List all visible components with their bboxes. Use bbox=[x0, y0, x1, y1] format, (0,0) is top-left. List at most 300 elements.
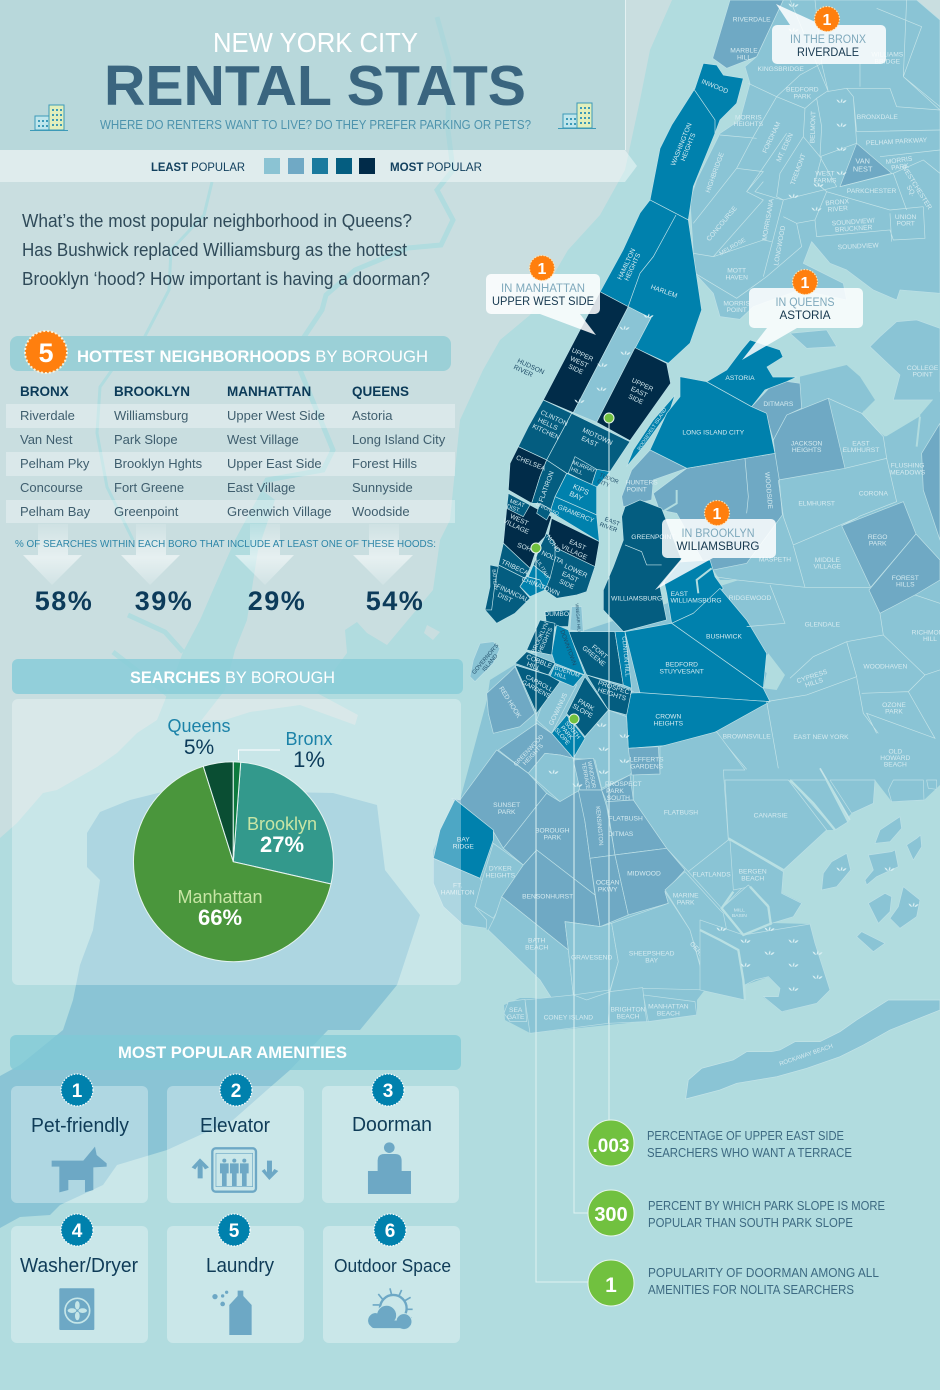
pie chart bbox=[134, 762, 333, 962]
Greenpoint and Williamsburg bbox=[603, 500, 682, 632]
Bronx base bbox=[690, 0, 940, 319]
arrows down to percentages bbox=[23, 524, 413, 585]
map: Bronx and upper Manhattan: RIVER bbox=[827, 205, 848, 214]
fact: Park Slope bbox=[588, 1190, 885, 1236]
leader lines from map to facts bbox=[536, 418, 609, 1282]
map: Manhattan, western Queens and north Brooklyn: DIST bbox=[496, 592, 513, 605]
map: Central and South Brooklyn: RIDGE bbox=[453, 844, 474, 851]
card: doorman: 3 bbox=[383, 1081, 393, 1102]
leader line: Bronx bbox=[238, 750, 280, 760]
map: Bronx and upper Manhattan: FORDHAM bbox=[762, 121, 782, 154]
Flatlands bbox=[688, 840, 750, 908]
Bedford Stuyvesant bbox=[625, 623, 770, 702]
Central Park bbox=[573, 307, 651, 422]
fact: terrace bbox=[588, 1120, 852, 1166]
map: Manhattan, western Queens and north Brooklyn: LONG ISLAND CITY bbox=[682, 430, 745, 437]
map: Manhattan, western Queens and north Brooklyn: CITY bbox=[596, 479, 610, 489]
map: Central and South Brooklyn: GRAVESEND bbox=[571, 954, 612, 961]
map: Queens and east Brooklyn: BEDFORD bbox=[665, 661, 698, 668]
table: neighborhoods by borough: Upper West Side bbox=[227, 408, 325, 423]
map: Manhattan, western Queens and north Brooklyn: UPPER bbox=[570, 347, 594, 363]
Chelsea bbox=[508, 447, 547, 503]
Greenwood Cemetery bbox=[528, 753, 580, 802]
map: Central and South Brooklyn: BEACH bbox=[525, 944, 548, 951]
Upper West Side bbox=[543, 292, 628, 413]
map: Manhattan, western Queens and north Brooklyn: EAST bbox=[568, 538, 587, 552]
map: Central and South Brooklyn: FORT bbox=[590, 644, 608, 661]
fact: Park Slope: 300 bbox=[594, 1204, 628, 1226]
Fresh Creek water bbox=[820, 768, 850, 820]
callout: Manhattan Upper West Side: IN MANHATTAN bbox=[501, 283, 585, 295]
map: Central and South Brooklyn: BROOKLYN bbox=[531, 622, 550, 654]
icon: buildings left bbox=[30, 105, 68, 130]
map: Bronx and upper Manhattan: PARK bbox=[793, 93, 812, 100]
map: Bronx and upper Manhattan: MARBLE bbox=[730, 48, 758, 55]
map: Bronx and upper Manhattan: HEIGHTS bbox=[734, 121, 764, 128]
table: neighborhoods by borough: BROOKLYN bbox=[114, 384, 190, 399]
map: Manhattan, western Queens and north Brooklyn: DIST. bbox=[506, 504, 521, 514]
card: outdoor space: Outdoor Space bbox=[334, 1256, 451, 1276]
map: Queens and east Brooklyn: PARK bbox=[885, 709, 903, 716]
map: Manhattan, western Queens and north Brooklyn: UNION SQ. bbox=[535, 502, 561, 518]
fact: doorman: AMENITIES FOR NOLITA SEARCHERS bbox=[648, 1283, 854, 1297]
Brighton Beach bbox=[608, 988, 647, 1023]
map: Manhattan, western Queens and north Brooklyn: MIDTOWN bbox=[581, 427, 614, 447]
map: Manhattan, western Queens and north Brooklyn: TRIBECA bbox=[500, 559, 530, 577]
callout: Bronx Riverdale: 1 bbox=[823, 12, 832, 29]
Midtown East bbox=[547, 413, 630, 473]
intro text bbox=[22, 211, 430, 289]
Lefferts Gardens bbox=[628, 747, 660, 775]
Tribeca bbox=[498, 543, 530, 578]
map: Bronx and upper Manhattan: POINT bbox=[726, 307, 747, 314]
map: Central and South Brooklyn: PARK bbox=[559, 725, 574, 741]
map: Queens and east Brooklyn: DITMARS bbox=[763, 401, 794, 408]
map: Bronx and upper Manhattan: MORRIS bbox=[723, 300, 751, 307]
map: Queens and east Brooklyn: ELMHURST bbox=[843, 447, 879, 454]
map: Bronx and upper Manhattan: HAVEN bbox=[725, 274, 748, 281]
Governors Island bbox=[470, 642, 500, 682]
map: Central and South Brooklyn: PARK bbox=[677, 900, 695, 907]
map: South Brooklyn and Queens base land bbox=[433, 560, 940, 1033]
card: washer/dryer bbox=[11, 1214, 148, 1343]
Astoria bbox=[707, 340, 797, 407]
map: Bronx and upper Manhattan: MELROSE bbox=[719, 238, 747, 257]
map: Central and South Brooklyn: GREENWOOD bbox=[513, 734, 546, 768]
map: Manhattan, western Queens and north Brooklyn: TUDOR bbox=[598, 473, 619, 486]
map: Queens and east Brooklyn: HEIGHTS bbox=[792, 447, 822, 454]
map: Central and South Brooklyn: BEACH bbox=[617, 1014, 640, 1021]
map: Central and South Brooklyn: BOROUGH bbox=[535, 828, 570, 835]
Riverdale bbox=[713, 0, 783, 68]
title: Rental Stats: RENTAL STATS bbox=[104, 54, 526, 118]
label: Brooklyn: 27% bbox=[260, 832, 304, 857]
card: elevator: 2 bbox=[231, 1081, 241, 1102]
callout: Brooklyn Williamsburg: WILIAMSBURG bbox=[676, 539, 760, 553]
Jamaica Bay channels bbox=[700, 780, 848, 1000]
Battery Park City bbox=[485, 565, 498, 610]
map: Manhattan, western Queens and north Brooklyn: VINEGAR HILL bbox=[574, 603, 582, 634]
map: Central and South Brooklyn: CLINTON HILL bbox=[620, 636, 630, 678]
table: neighborhoods by borough: Upper East Side bbox=[227, 456, 322, 471]
heading bar: hottest neighborhoods bbox=[10, 331, 451, 373]
map: Central and South Brooklyn: GOVERNOR'S bbox=[471, 643, 501, 676]
Park Slope bbox=[567, 677, 608, 737]
map: Queens and east Brooklyn: HILL bbox=[923, 636, 937, 643]
map: Manhattan, western Queens and north Brooklyn: FINANCIAL bbox=[495, 583, 530, 604]
land: New Jersey shoreline bbox=[0, 0, 940, 838]
fact: doorman bbox=[588, 1260, 879, 1306]
map: Manhattan, western Queens and north Brooklyn: EAST bbox=[671, 591, 688, 598]
map: Manhattan, western Queens and north Brooklyn: VILLAGE bbox=[560, 543, 588, 562]
map: Central and South Brooklyn: ISLAND bbox=[482, 653, 499, 673]
Kips Bay bbox=[555, 473, 597, 515]
map: Manhattan, western Queens and north Brooklyn: MEAT bbox=[509, 499, 526, 510]
percentages: 29% bbox=[248, 586, 306, 616]
heading bar: searches by borough: SEARCHES BY BOROUGH bbox=[130, 668, 335, 687]
callout: Queens Astoria: 1 bbox=[801, 275, 810, 292]
Windsor Terrace bbox=[573, 758, 602, 790]
map: Manhattan, western Queens and north Brooklyn: POINT bbox=[626, 486, 647, 493]
map: Queens and east Brooklyn: HOWARD bbox=[880, 755, 911, 762]
card: pet-friendly: Pet-friendly bbox=[31, 1115, 129, 1137]
map: Queens and east Brooklyn: EAST NEW YORK bbox=[793, 734, 849, 741]
map: Queens and east Brooklyn: RIDGEWOOD bbox=[729, 595, 771, 602]
Manhattan Beach bbox=[643, 995, 697, 1022]
map: Central and South Brooklyn: HEIGHTS bbox=[538, 627, 555, 654]
Boerum Hill bbox=[550, 665, 583, 687]
map: Bronx and upper Manhattan: MOTT bbox=[727, 268, 746, 275]
table: neighborhoods by borough: Sunnyside bbox=[352, 480, 413, 495]
map: Central and South Brooklyn: TERRACE bbox=[580, 762, 590, 790]
map: Bronx and upper Manhattan: WILLIAMS bbox=[871, 52, 904, 59]
fact: terrace: .003 bbox=[593, 1136, 629, 1157]
map: Manhattan, western Queens and north Brooklyn: HUDSON bbox=[516, 358, 545, 376]
callout: Queens Astoria: ASTORIA bbox=[780, 308, 830, 322]
map: Queens and east Brooklyn: HILLS bbox=[896, 582, 915, 589]
map: Queens and east Brooklyn: STUYVESANT bbox=[659, 668, 704, 675]
map: Manhattan, western Queens and north Brooklyn: EAST bbox=[560, 571, 579, 584]
map: Central and South Brooklyn: LEFFERTS bbox=[630, 757, 664, 764]
map: Canarsie and Jamaica Bay: BERGEN bbox=[739, 868, 767, 875]
map: Central and South Brooklyn: BENSONHURST bbox=[522, 893, 573, 900]
map: Manhattan, western Queens and north Brooklyn: ROOSEVELT ISLAND bbox=[637, 407, 669, 452]
Sunset Park bbox=[452, 750, 547, 848]
Hunters Point bbox=[622, 450, 687, 507]
map: Manhattan, western Queens and north Brooklyn: UPPER bbox=[630, 377, 654, 393]
map: Bronx and upper Manhattan: HEIGHTS bbox=[680, 132, 698, 162]
Chinatown bbox=[520, 577, 545, 597]
South Park Slope bbox=[552, 715, 585, 758]
map: Queens and east Brooklyn: OZONE bbox=[882, 702, 906, 709]
map: Queens and east Brooklyn: HILLS bbox=[804, 677, 825, 689]
heading bar: most popular amenities bbox=[10, 1035, 461, 1070]
map: Central and South Brooklyn: BATH bbox=[528, 937, 545, 944]
percentages: 54% bbox=[366, 586, 424, 616]
Ridgewood reservoir water bbox=[760, 653, 785, 690]
card: washer/dryer: Washer/Dryer bbox=[20, 1255, 138, 1277]
map: Bronx and upper Manhattan: HIGHBRIDGE bbox=[705, 151, 726, 194]
map: Manhattan, western Queens and north Brooklyn: EAST bbox=[604, 517, 621, 528]
card: pet-friendly: 1 bbox=[72, 1081, 83, 1102]
Greenwood Heights bbox=[498, 723, 573, 773]
label: Bronx: 1% bbox=[293, 747, 325, 772]
table: neighborhoods by borough bbox=[6, 384, 455, 523]
title: New York City: NEW YORK CITY bbox=[213, 27, 418, 58]
map: Manhattan, western Queens and north Brooklyn: HILL bbox=[570, 467, 583, 477]
map: Manhattan, western Queens and north Brooklyn: SIDE bbox=[558, 578, 575, 591]
map: Central and South Brooklyn: PARK bbox=[576, 698, 596, 713]
Flatbush bbox=[633, 732, 745, 872]
Murray Hill bbox=[568, 457, 597, 485]
header tint panel bbox=[0, 0, 625, 150]
map: Central and South Brooklyn bbox=[433, 620, 750, 1033]
intro text: Brooklyn ‘hood? How important is having a doorman? bbox=[22, 269, 430, 289]
intro text: Has Bushwick replaced Williamsburg as the hottest bbox=[22, 240, 407, 260]
map: Manhattan, western Queens and north Brooklyn: HUNTERS bbox=[626, 480, 658, 487]
table: neighborhoods by borough: MANHATTAN bbox=[227, 384, 311, 399]
map: Bronx and upper Manhattan: PARKCHESTER bbox=[847, 188, 897, 195]
map: Manhattan, western Queens and north Brooklyn: KITCHEN bbox=[531, 423, 561, 442]
percentages: 39% bbox=[135, 586, 193, 616]
callout: Brooklyn Williamsburg: 1 bbox=[713, 506, 722, 523]
map: Bronx and upper Manhattan: CONCOURSE bbox=[706, 205, 739, 243]
map: Bronx and upper Manhattan: PARK bbox=[891, 163, 910, 172]
Sea Gate bbox=[504, 999, 527, 1022]
map: Central and South Brooklyn: GERRITSEN BEACH bbox=[688, 941, 734, 994]
map: Manhattan, western Queens and north Brooklyn: SOHO bbox=[516, 542, 537, 555]
callout: Brooklyn Williamsburg bbox=[655, 500, 776, 590]
map: Central and South Brooklyn: HEIGHTS bbox=[486, 873, 516, 880]
Flushing edge bbox=[922, 423, 940, 540]
Washington Heights, Inwood, Hamilton Heights and Harlem bbox=[600, 63, 743, 363]
table: neighborhoods by borough: Williamsburg bbox=[114, 408, 188, 423]
Rego Park bbox=[842, 502, 916, 587]
map: Central and South Brooklyn: FLATBUSH bbox=[609, 816, 643, 823]
map: Central and South Brooklyn: SOUTH bbox=[607, 795, 630, 802]
map: Central and South Brooklyn: PARK bbox=[606, 788, 624, 795]
label: Brooklyn: Brooklyn bbox=[247, 814, 317, 834]
map: Queens and east Brooklyn: REGO bbox=[868, 534, 887, 541]
table: neighborhoods by borough: Forest Hills bbox=[352, 456, 418, 471]
map: Bronx and upper Manhattan: MORRISANIA bbox=[761, 198, 776, 241]
Long Island City bbox=[650, 377, 775, 468]
card: outdoor space: 6 bbox=[385, 1221, 395, 1242]
map: Bronx and upper Manhattan: HILL bbox=[737, 54, 751, 61]
map: Bronx and upper Manhattan: MORRIS bbox=[735, 114, 762, 121]
callout: Queens Astoria bbox=[742, 270, 863, 360]
map: Central and South Brooklyn: SEA bbox=[509, 1007, 523, 1014]
table: neighborhoods by borough: BRONX bbox=[20, 384, 69, 399]
card: laundry: Laundry bbox=[206, 1255, 274, 1277]
fact: doorman: POPULARITY OF DOORMAN AMONG ALL bbox=[648, 1266, 879, 1280]
icon: buildings right bbox=[558, 103, 596, 128]
map: Canarsie and Jamaica Bay: CANARSIE bbox=[754, 812, 788, 819]
label: Manhattan bbox=[177, 887, 263, 930]
table: neighborhoods by borough: Park Slope bbox=[114, 432, 178, 447]
card: elevator: Elevator bbox=[200, 1115, 270, 1137]
card: pet-friendly bbox=[11, 1074, 148, 1203]
Crown Heights bbox=[625, 693, 770, 748]
map: Manhattan, western Queens and north Brooklyn: WEST bbox=[509, 513, 529, 528]
map: Bronx and upper Manhattan: SQ. bbox=[905, 184, 917, 198]
East Williamsburg creek water bbox=[697, 568, 712, 593]
map: Central and South Brooklyn: CARROLL bbox=[524, 674, 554, 694]
subtitle: WHERE DO RENTERS WANT TO LIVE? DO THEY PREFER PARKING OR PETS? bbox=[100, 118, 531, 132]
map: Central and South Brooklyn: KENSINGTON bbox=[594, 806, 603, 846]
Clinton Hill bbox=[615, 632, 632, 688]
map: Central and South Brooklyn: SOUTH bbox=[563, 721, 581, 741]
label: Brooklyn bbox=[247, 814, 317, 857]
decorative park tufts bbox=[548, 2, 918, 991]
map: Manhattan, western Queens and north Brooklyn: LIL ITALY bbox=[535, 559, 551, 581]
card: laundry: 5 bbox=[229, 1221, 240, 1242]
map: Manhattan, western Queens and north Brooklyn: ASTORIA bbox=[725, 375, 755, 382]
fact: Park Slope: PERCENT BY WHICH PARK SLOPE IS MORE bbox=[648, 1199, 885, 1213]
callout: Manhattan Upper West Side: 1 bbox=[538, 261, 547, 278]
Downtown Brooklyn bbox=[552, 625, 585, 675]
map: Manhattan, western Queens and north Brooklyn: BAY bbox=[568, 489, 585, 503]
map: Queens and east Brooklyn: MEADOWS bbox=[890, 469, 926, 476]
Prospect Heights bbox=[587, 675, 632, 715]
Flatiron bbox=[532, 460, 567, 512]
map: Manhattan, western Queens and north Brooklyn: FLATIRON bbox=[538, 470, 556, 503]
percentages: 58% bbox=[35, 586, 93, 616]
map: Central and South Brooklyn: PROSPECT bbox=[597, 680, 634, 698]
Carroll Gardens bbox=[515, 665, 560, 713]
callout: Bronx Riverdale: IN THE BRONX bbox=[790, 34, 866, 46]
fact: doorman: 1 bbox=[605, 1274, 617, 1297]
map: Queens and east Brooklyn: CROWN bbox=[655, 713, 681, 720]
map: Manhattan, western Queens and north Brooklyn: HAMILTON bbox=[617, 247, 637, 281]
Red Hook bbox=[487, 667, 535, 733]
Dyker Heights bbox=[475, 843, 523, 918]
map: Bronx and upper Manhattan: BRONX bbox=[825, 198, 850, 207]
Kensington bbox=[578, 790, 615, 858]
map: Manhattan, western Queens and north Brooklyn: MURRAY bbox=[571, 460, 596, 475]
map: Manhattan, western Queens and north Brooklyn: SIDE bbox=[567, 363, 585, 376]
Vinegar Hill bbox=[570, 607, 583, 632]
legend: least to most popular bbox=[151, 158, 482, 174]
map: Bronx and upper Manhattan: BELMONT bbox=[809, 111, 818, 143]
card: doorman bbox=[322, 1074, 459, 1203]
Flushing inlet water bbox=[863, 412, 920, 447]
map: Bronx and upper Manhattan: SOUNDVIEW/ bbox=[832, 217, 875, 227]
label: Queens: Queens bbox=[167, 716, 231, 736]
map: Manhattan, western Queens and north Brooklyn: EAST bbox=[580, 435, 599, 449]
map: Queens and east Brooklyn: WOODSIDE bbox=[763, 472, 773, 510]
map: Bronx and upper Manhattan: WASHINGTON bbox=[670, 122, 694, 167]
Little Italy bbox=[528, 565, 550, 590]
map: Queens and east Brooklyn: OLD bbox=[888, 748, 902, 755]
map: Central and South Brooklyn: WINDSOR bbox=[586, 761, 596, 789]
map: Central and South Brooklyn: GREENE bbox=[580, 645, 607, 669]
map: Central and South Brooklyn: MANHATTAN bbox=[648, 1004, 689, 1011]
fact: terrace: SEARCHERS WHO WANT A TERRACE bbox=[647, 1146, 852, 1160]
Bushwick bbox=[672, 588, 767, 688]
map: Manhattan, western Queens and north Brooklyn: EAST bbox=[630, 386, 648, 399]
map: Manhattan, western Queens and north Brooklyn: HELLS bbox=[537, 417, 559, 432]
map: Manhattan, western Queens and north Brooklyn: KIPS bbox=[572, 482, 591, 497]
heading bar: most popular amenities: MOST POPULAR AMENITIES bbox=[118, 1043, 347, 1062]
map: Bronx and upper Manhattan: RIVERDALE bbox=[733, 17, 771, 24]
map: Queens and east Brooklyn: MIDDLE bbox=[815, 557, 840, 564]
table: neighborhoods by borough: West Village bbox=[227, 432, 299, 447]
Dumbo bbox=[545, 610, 570, 627]
Lower East Side bbox=[545, 543, 595, 598]
table: neighborhoods by borough: Pelham Pky bbox=[20, 456, 90, 471]
Van Nest bbox=[840, 143, 892, 187]
map: Central and South Brooklyn: COBBLE bbox=[525, 654, 553, 670]
table: neighborhoods by borough: Brooklyn Hghts bbox=[114, 456, 203, 471]
card: laundry bbox=[167, 1214, 304, 1343]
Bronx neighborhood boundaries bbox=[693, 0, 940, 298]
map: Queens and east Brooklyn: CYPRESS bbox=[796, 668, 829, 685]
map: Rockaway peninsula: ROCKAWAY BEACH bbox=[779, 1044, 834, 1068]
Flatbush south bbox=[607, 800, 667, 855]
map: Central and South Brooklyn: DITMAS bbox=[608, 831, 634, 838]
table: neighborhoods by borough: Astoria bbox=[352, 408, 393, 423]
heading bar: searches by borough bbox=[12, 659, 463, 694]
map: Queens and east Brooklyn: HEIGHTS bbox=[654, 720, 684, 727]
map: Central and South Brooklyn: FLATBUSH bbox=[664, 810, 698, 817]
map: Manhattan, western Queens and north Brooklyn: VILLAGE bbox=[502, 518, 530, 536]
map: Queens and east Brooklyn: EAST bbox=[852, 440, 870, 447]
Clinton / Hell's Kitchen bbox=[518, 400, 572, 460]
table: neighborhoods by borough: Greenwich Village bbox=[227, 504, 332, 519]
Brooklyn Heights bbox=[527, 620, 555, 655]
map: Queens and east Brooklyn: VILLAGE bbox=[813, 564, 842, 571]
map: Central and South Brooklyn: DYKER bbox=[489, 866, 512, 873]
map: Central and South Brooklyn: PARK bbox=[544, 835, 562, 842]
panel: searches pie chart bbox=[12, 699, 461, 985]
map: Canarsie and Jamaica Bay: BEACH bbox=[741, 875, 764, 882]
callout: Brooklyn Williamsburg: IN BROOKLYN bbox=[682, 528, 754, 540]
Borough Park bbox=[503, 790, 595, 895]
map: Manhattan, western Queens and north Brooklyn: WILLIAMSBURG bbox=[670, 598, 721, 605]
map: Manhattan, western Queens and north Brooklyn: LOWER bbox=[563, 563, 588, 580]
map: Central and South Brooklyn: BRIGHTON bbox=[610, 1007, 646, 1014]
map: Rikers Island and College Point shore: POINT bbox=[912, 372, 933, 379]
map: Central and South Brooklyn: SLOPE bbox=[571, 703, 594, 720]
label: Bronx bbox=[285, 729, 333, 772]
map: Bronx and upper Manhattan: WESTCHESTER bbox=[900, 164, 933, 211]
map: Central and South Brooklyn: HEIGHTS bbox=[522, 743, 545, 767]
map: Manhattan, western Queens and north Brooklyn: HEIGHTS bbox=[624, 252, 643, 282]
map: Bronx and upper Manhattan: NEST bbox=[853, 164, 873, 173]
map: Central and South Brooklyn: HILL bbox=[553, 672, 568, 682]
Bath Beach bbox=[488, 897, 573, 998]
Marine Park bbox=[665, 872, 740, 997]
Sheepshead Bay bbox=[610, 892, 707, 992]
card: outdoor space bbox=[323, 1214, 460, 1343]
map: Bronx and upper Manhattan: LONGWOOD bbox=[773, 225, 787, 266]
map: Central and South Brooklyn: SHEEPSHEAD bbox=[629, 950, 675, 957]
map: Central and South Brooklyn: FLATLANDS bbox=[693, 872, 731, 879]
label: Manhattan: 66% bbox=[198, 905, 242, 930]
map: Manhattan, western Queens and north Brooklyn: NOHO bbox=[544, 534, 561, 554]
map: Queens and east Brooklyn: FLUSHING bbox=[891, 463, 924, 470]
percentages bbox=[35, 586, 424, 616]
Queens base bbox=[713, 365, 940, 580]
map: Central and South Brooklyn: RED HOOK bbox=[497, 686, 522, 720]
East Village bbox=[547, 518, 599, 567]
map: Canarsie and Jamaica Bay: BASIN bbox=[732, 913, 747, 919]
map: Central and South Brooklyn: HAMILTON bbox=[441, 890, 475, 897]
map: Manhattan, western Queens and north Brooklyn: GREENPOINT bbox=[631, 534, 675, 541]
map: Manhattan, western Queens and north Brooklyn: WILLIAMSBURG bbox=[611, 595, 662, 602]
map: Central and South Brooklyn: BAY bbox=[457, 837, 470, 844]
